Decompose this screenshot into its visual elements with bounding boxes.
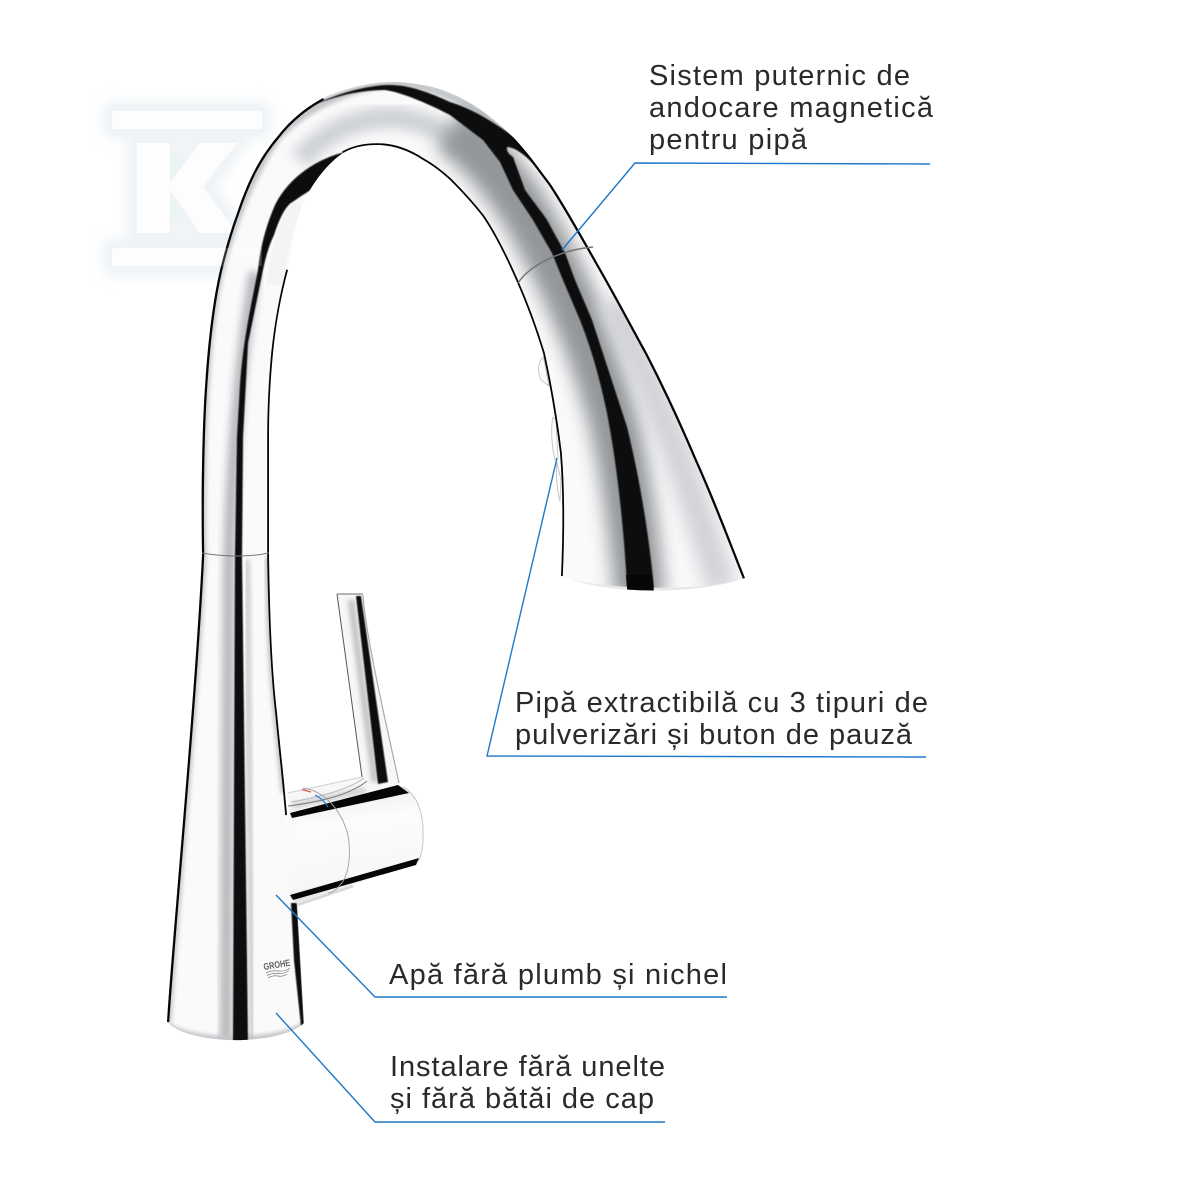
callout text: andocare magnetică (649, 92, 934, 124)
spout buttons (539, 357, 561, 501)
watermark overlay on faucet (205, 248, 262, 266)
leader line (562, 163, 930, 250)
faucet illustration (150, 70, 760, 1060)
lever handle (287, 594, 403, 818)
spout mouth (573, 580, 721, 590)
callout text: Sistem puternic de (649, 60, 910, 92)
callout text (390, 1051, 665, 1115)
leader line (487, 458, 926, 757)
callout text (649, 60, 934, 156)
watermark logo (112, 111, 262, 266)
callout: tool-free install (276, 1013, 665, 1122)
callout text (515, 687, 928, 751)
brand logo on body (263, 958, 291, 978)
black edge lines (167, 98, 745, 1022)
seams (202, 247, 593, 556)
callout text: Apă fără plumb și nichel (389, 959, 727, 991)
callout text: pulverizări și buton de pauză (515, 719, 913, 751)
callout: magnetic docking (562, 60, 934, 250)
faucet body and spout (150, 70, 760, 1060)
highlights (288, 201, 294, 207)
leader line (276, 1013, 665, 1122)
callout: lead and nickel free (276, 895, 727, 997)
callout text: Pipă extractibilă cu 3 tipuri de (515, 687, 928, 719)
chrome shading (167, 82, 722, 1040)
callout text: și fără bătăi de cap (390, 1083, 654, 1115)
callout: pull-out spray (487, 458, 928, 757)
temperature blue mark (315, 795, 328, 807)
callout text: pentru pipă (649, 124, 808, 156)
callout text: Instalare fără unelte (390, 1051, 665, 1083)
leader line (276, 895, 727, 997)
temperature marks (302, 790, 311, 792)
infographic canvas (102, 64, 933, 1123)
dark reflection stripes (233, 85, 655, 1045)
brand logo on body: GROHE (263, 958, 291, 973)
mixer cylinder (280, 785, 423, 905)
